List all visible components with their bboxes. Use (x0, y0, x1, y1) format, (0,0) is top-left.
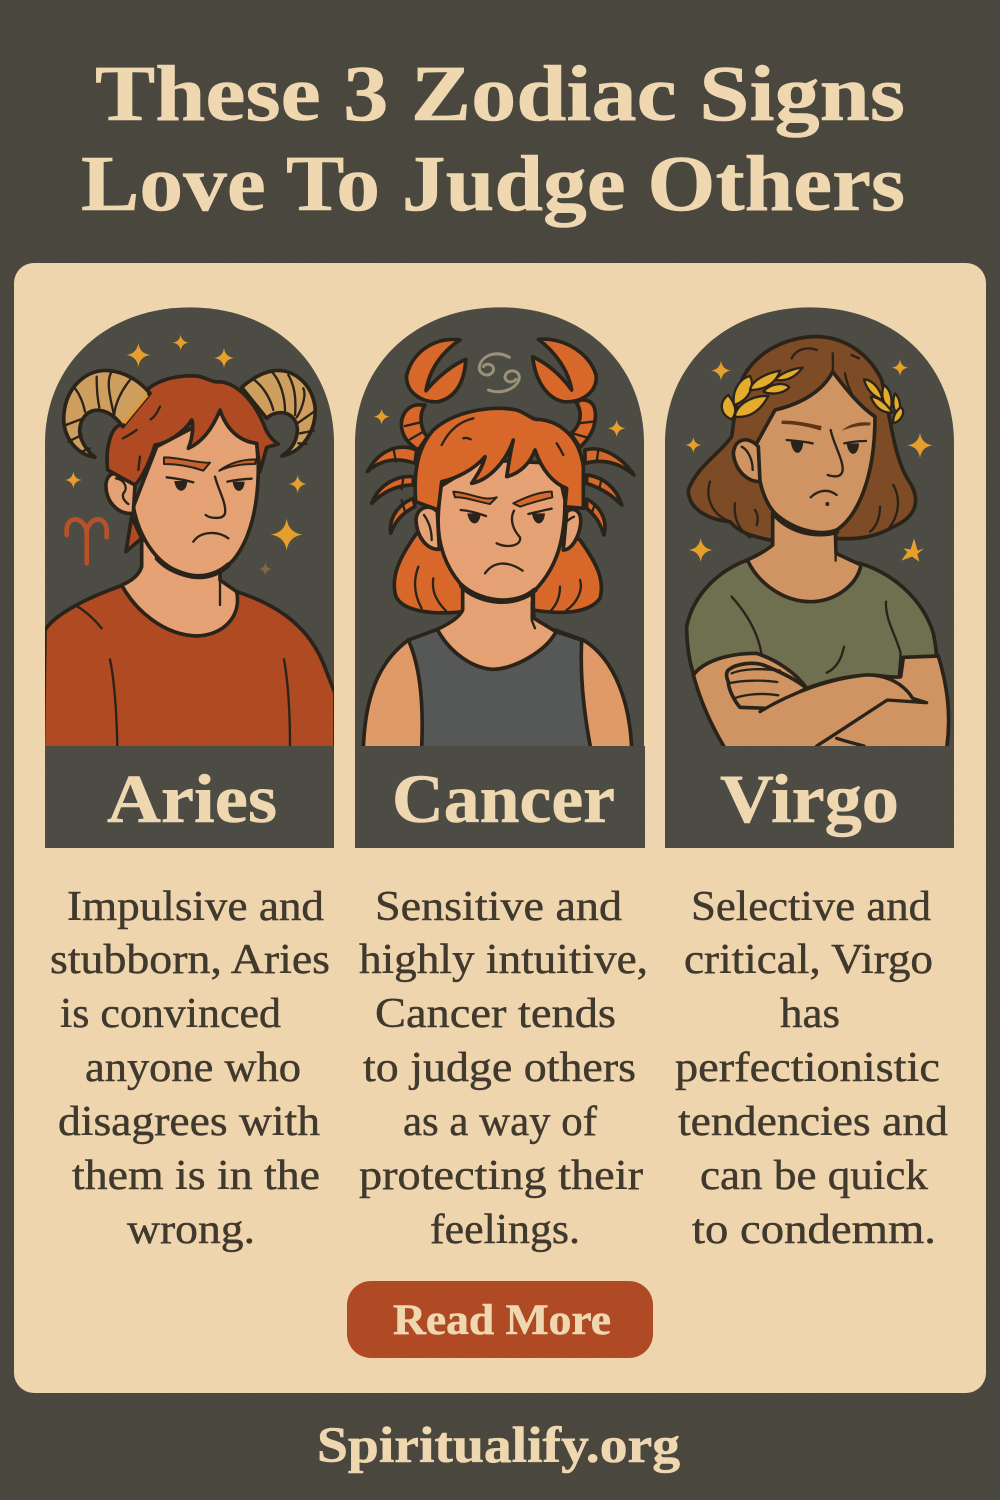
hair (107, 376, 278, 485)
name label: Virgo: Virgo (720, 761, 899, 837)
card: Cancer (355, 307, 648, 1253)
description: Virgo: to condemm. (692, 1207, 936, 1253)
face (453, 492, 552, 507)
name label: Cancer (355, 746, 645, 848)
description: Virgo: critical, Virgo (684, 937, 933, 983)
description: Cancer: to judge others (363, 1045, 636, 1091)
title: Love To Judge Others (81, 141, 905, 228)
illustration: Virgo character with laurel and crossed arms (665, 307, 954, 748)
hair back (394, 530, 463, 613)
description: Cancer: highly intuitive, (359, 937, 648, 983)
description: Cancer: protecting their (359, 1153, 643, 1199)
description: Cancer: feelings. (430, 1207, 580, 1253)
description: Aries: wrong. (127, 1207, 255, 1253)
laurel (722, 368, 903, 423)
name label: Cancer: Cancer (392, 761, 615, 837)
button: Read More: Read More (393, 1297, 611, 1344)
card: Virgo (665, 307, 954, 1253)
description: Aries: Impulsive and (67, 884, 324, 930)
description: Aries (50, 884, 330, 1253)
footer: website: Spiritualify.org (317, 1418, 680, 1474)
name label: Virgo (665, 746, 954, 848)
description: Cancer: as a way of (403, 1099, 597, 1145)
hair front (415, 408, 583, 510)
description: Virgo (675, 884, 948, 1253)
description: Aries: them is in the (72, 1153, 320, 1199)
zodiac glyph (479, 354, 519, 392)
description: Aries: anyone who (85, 1045, 301, 1091)
claws and legs (401, 405, 427, 450)
description: Cancer (359, 884, 648, 1253)
crossed arms (693, 653, 949, 748)
description: Virgo: perfectionistic (675, 1045, 940, 1091)
description: Cancer: Cancer tends (375, 991, 616, 1037)
hair (688, 337, 916, 540)
description: Virgo: Selective and (691, 884, 931, 930)
body (687, 553, 937, 697)
name label: Aries: Aries (107, 761, 277, 837)
description: Virgo: can be quick (700, 1153, 928, 1199)
name label: Aries (45, 746, 334, 848)
right horn (242, 370, 315, 456)
body (363, 630, 632, 748)
description: Aries: is convinced (60, 991, 281, 1037)
description: Virgo: has (780, 991, 840, 1037)
button: Read More (347, 1281, 653, 1358)
illustration: Aries character with ram horns (43, 307, 335, 748)
panel: main card (14, 263, 986, 1393)
eyebrows and face (164, 457, 210, 471)
description: Virgo: tendencies and (678, 1099, 948, 1145)
head (438, 460, 565, 600)
left horn (64, 370, 150, 457)
title: These 3 Zodiac Signs (95, 51, 905, 138)
head (757, 372, 875, 533)
illustration: Cancer character with crab claws (355, 307, 644, 748)
face (782, 421, 871, 431)
description: Aries: disagrees with (58, 1099, 320, 1145)
title (81, 51, 905, 228)
card: Aries (43, 307, 335, 1253)
description: Aries: stubborn, Aries (50, 937, 330, 983)
description: Cancer: Sensitive and (375, 884, 622, 930)
